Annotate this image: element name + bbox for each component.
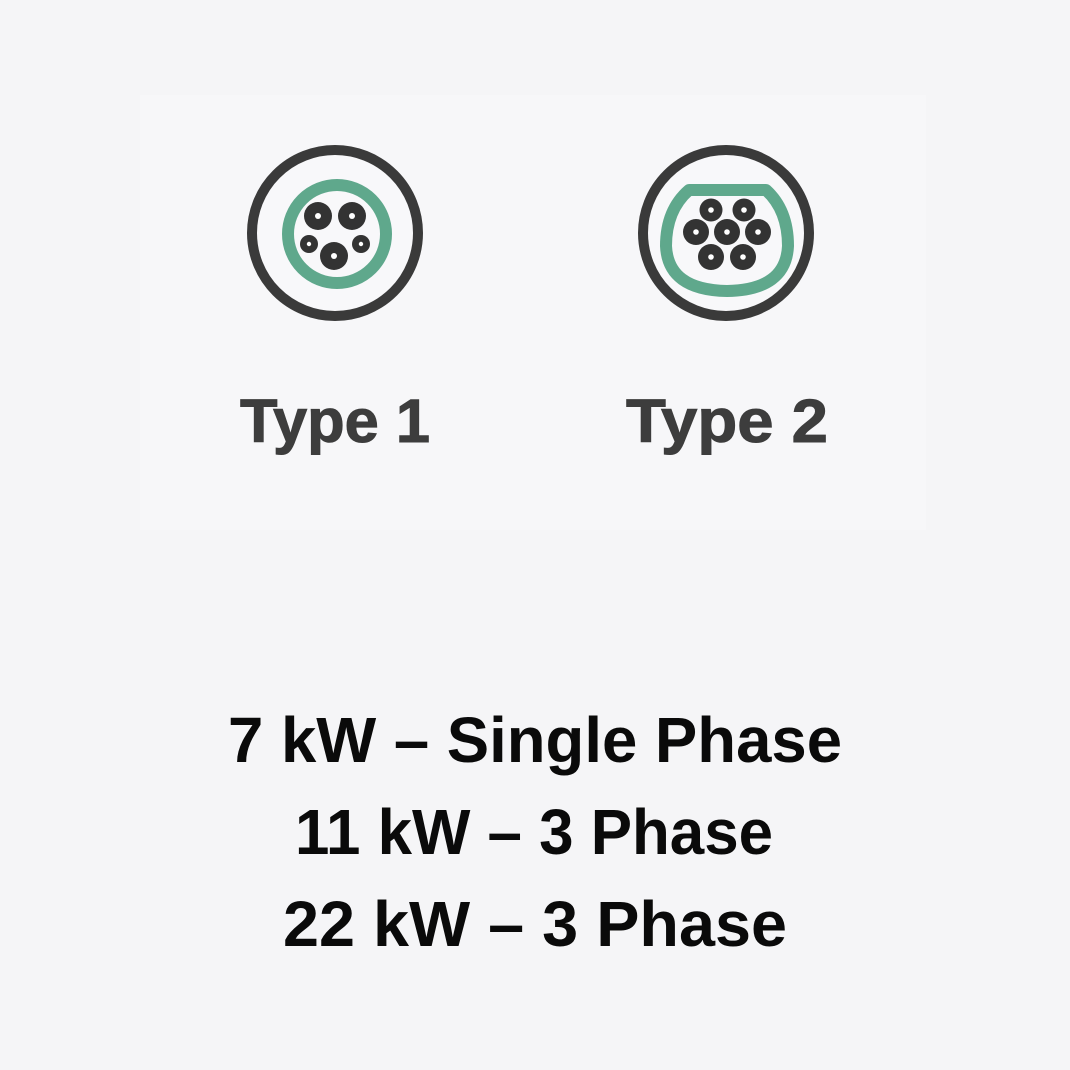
text block: power ratings: 22 kW – 3 Phase (283, 888, 787, 960)
panel: connectors (140, 95, 926, 530)
text block: power ratings: 7 kW – Single Phase (228, 704, 842, 776)
label: Type 1: Type 1 (240, 387, 430, 455)
icon: type 1 connector (252, 150, 418, 316)
text block: power ratings (228, 704, 842, 960)
icon: type 2 connector (643, 150, 809, 316)
label: Type 2: Type 2 (626, 387, 828, 455)
text block: power ratings: 11 kW – 3 Phase (295, 796, 773, 868)
